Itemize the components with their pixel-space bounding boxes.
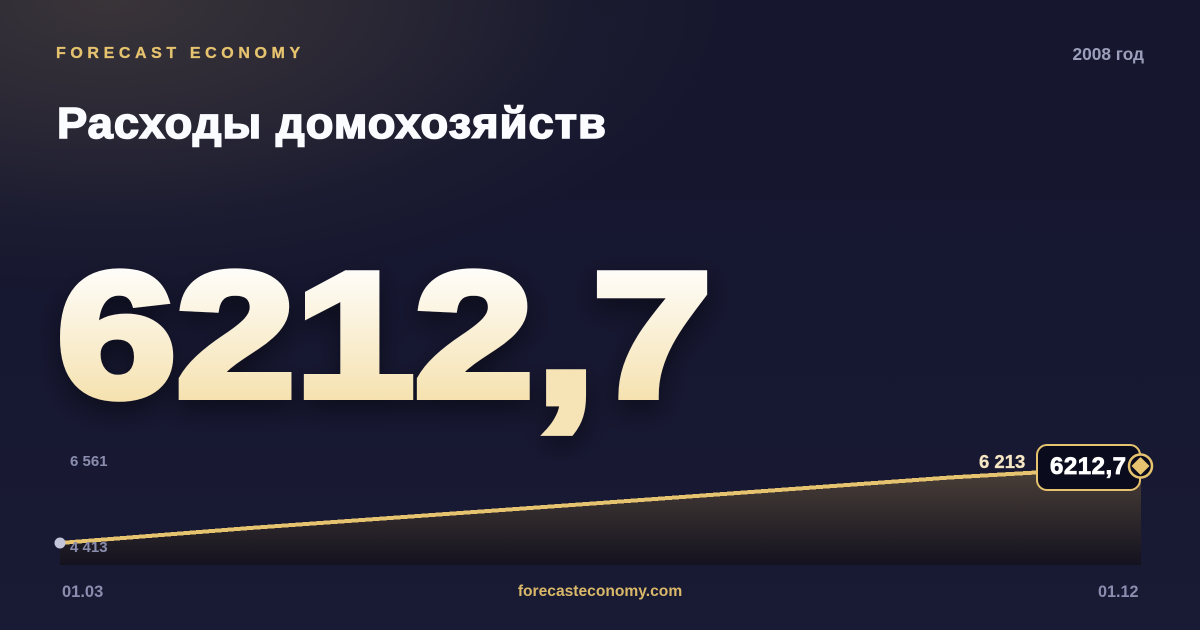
end marker	[1129, 454, 1152, 478]
end date: 01.12	[1098, 583, 1139, 601]
area under line	[60, 466, 1141, 565]
value callout	[1037, 445, 1140, 490]
big value: 7	[593, 236, 712, 434]
start point	[54, 538, 66, 548]
big value: ,	[536, 230, 596, 443]
brand label: FORECAST ECONOMY	[56, 45, 305, 62]
year label: 2008 год	[1072, 44, 1144, 64]
value callout: 6212,7	[1050, 453, 1126, 480]
axis max label: 6 561	[70, 453, 108, 470]
source: forecasteconomy.com	[518, 583, 682, 600]
last value label: 6 213	[979, 451, 1025, 472]
big value	[57, 230, 712, 446]
big value: 6212	[57, 236, 533, 434]
axis min label: 4 413	[70, 539, 108, 556]
trend line	[60, 466, 1140, 543]
title: Расходы домохозяйств	[57, 99, 607, 148]
start date: 01.03	[62, 583, 103, 601]
